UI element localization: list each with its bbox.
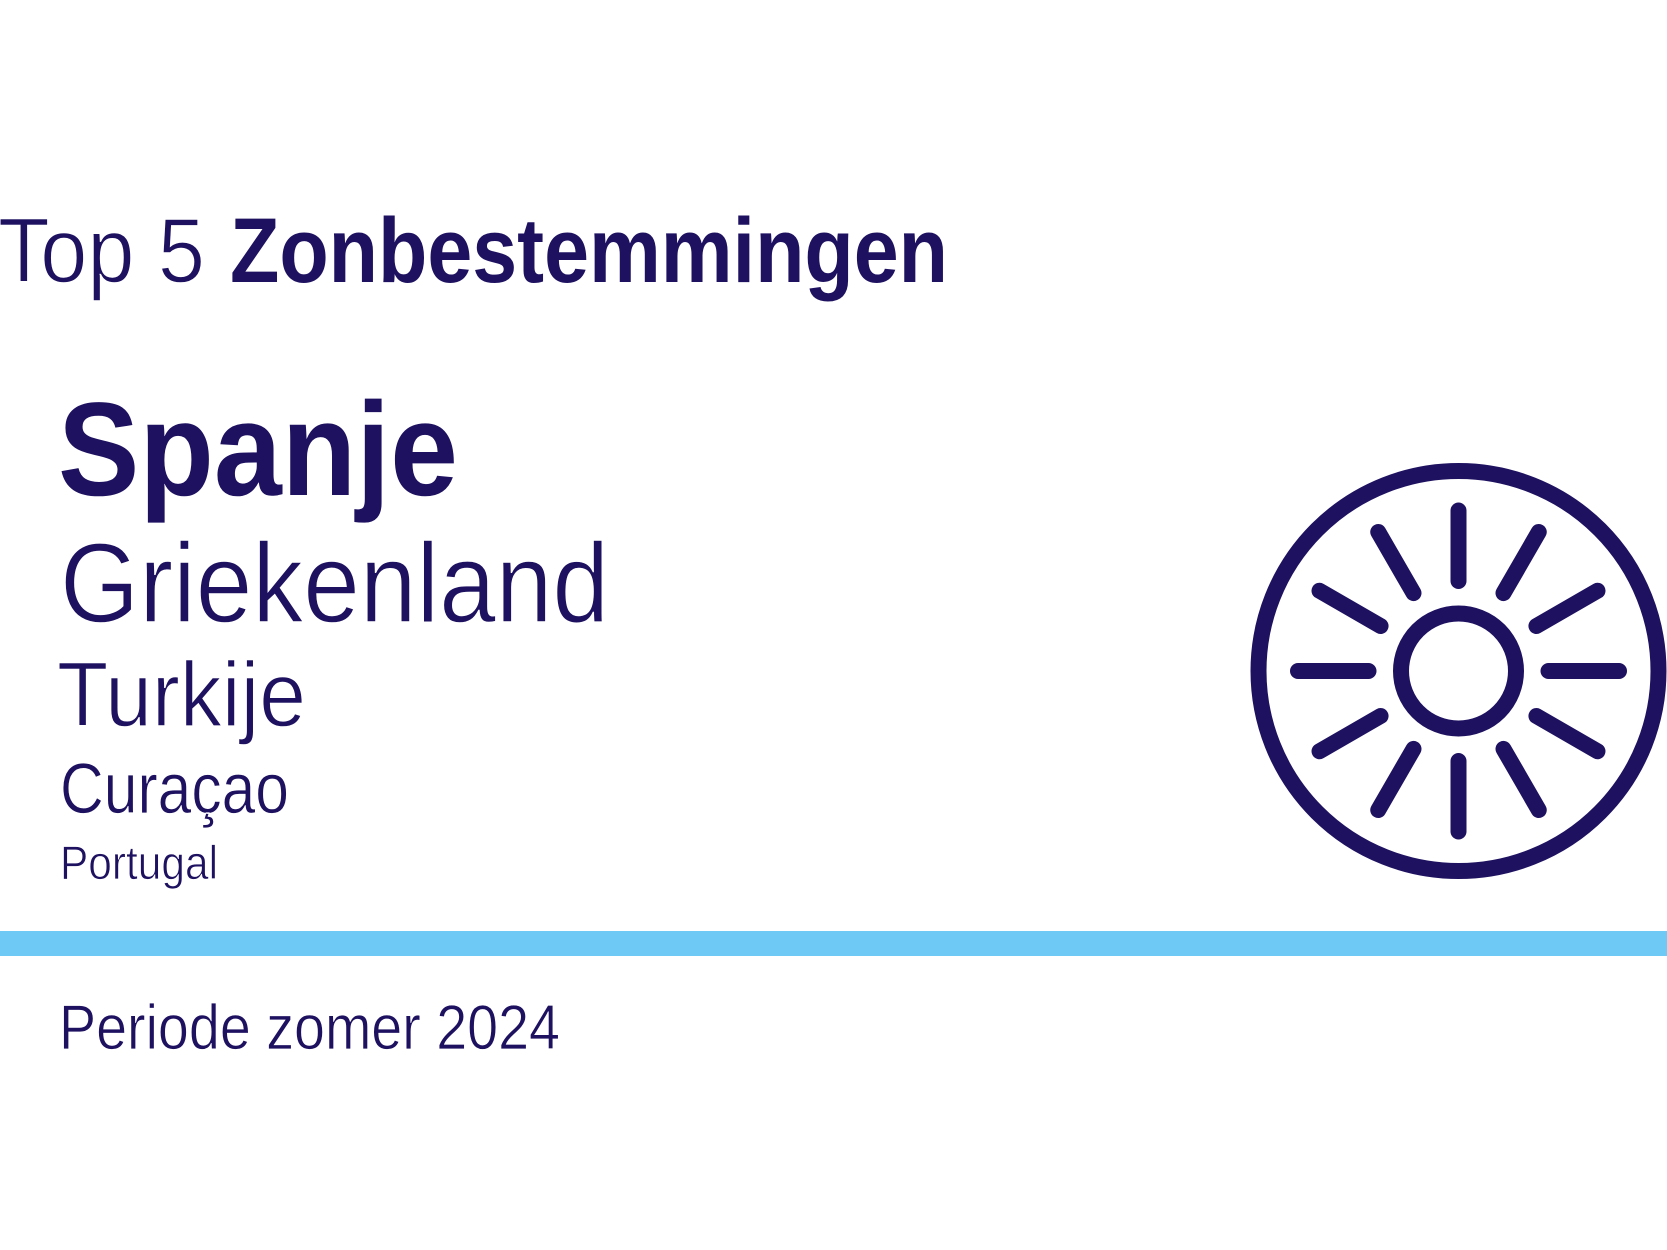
ranked list of destinations <box>57 376 609 889</box>
light blue divider bar <box>0 931 1667 956</box>
title <box>0 200 948 302</box>
icon: sun in circle <box>1258 471 1658 871</box>
rank 2: Griekenland: Griekenland <box>60 520 609 646</box>
footer: period: Periode zomer 2024 <box>59 993 560 1063</box>
rank 3: Turkije: Turkije <box>57 644 306 746</box>
rank 4: Curaçao: Curaçao <box>60 750 289 829</box>
rank 1: Spanje: Spanje <box>58 376 458 524</box>
title: Top 5 <box>0 200 205 302</box>
rank 5: Portugal: Portugal <box>60 836 218 889</box>
title: Zonbestemmingen <box>230 200 948 302</box>
